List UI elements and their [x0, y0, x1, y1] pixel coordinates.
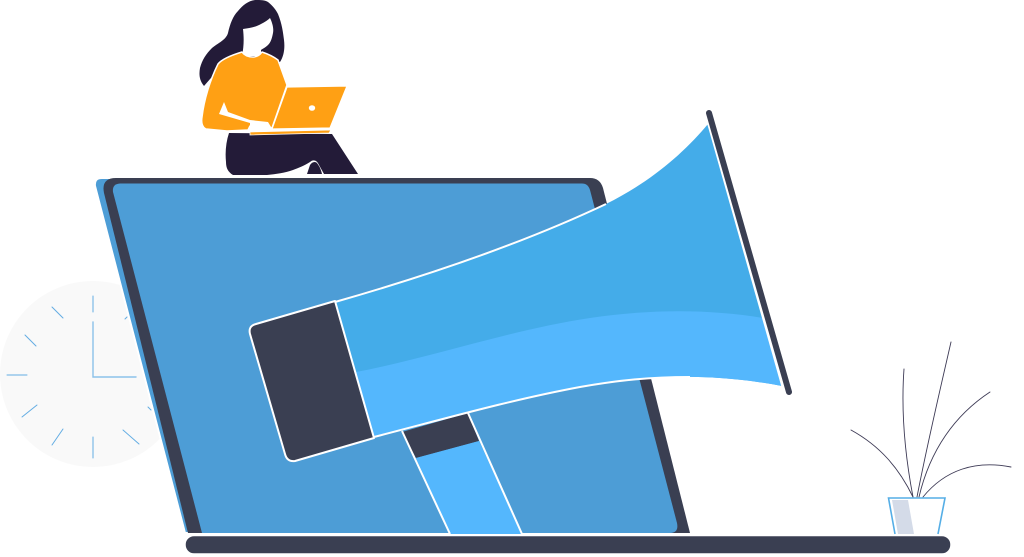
person sitting with laptop [199, 0, 358, 175]
megaphone horn [335, 124, 782, 437]
megaphone handle [402, 413, 522, 534]
face and neck [242, 18, 273, 56]
legs [226, 133, 358, 175]
open laptop screen [272, 86, 347, 129]
orange sweater [202, 52, 287, 131]
icon: wall clock [0, 281, 186, 467]
horn lower highlight band [356, 311, 782, 437]
gap between arm and body [219, 102, 272, 131]
laptop screen [95, 178, 690, 533]
megaphone rear body [250, 301, 374, 461]
laptop logo dot [309, 105, 315, 111]
laptop base bar [185, 536, 951, 554]
megaphone rim [709, 113, 789, 392]
potted plant [851, 342, 1011, 534]
laptop keyboard base [250, 130, 331, 135]
leaves [851, 342, 1011, 497]
pot [892, 500, 914, 534]
hair [199, 0, 284, 86]
foot [307, 162, 322, 174]
